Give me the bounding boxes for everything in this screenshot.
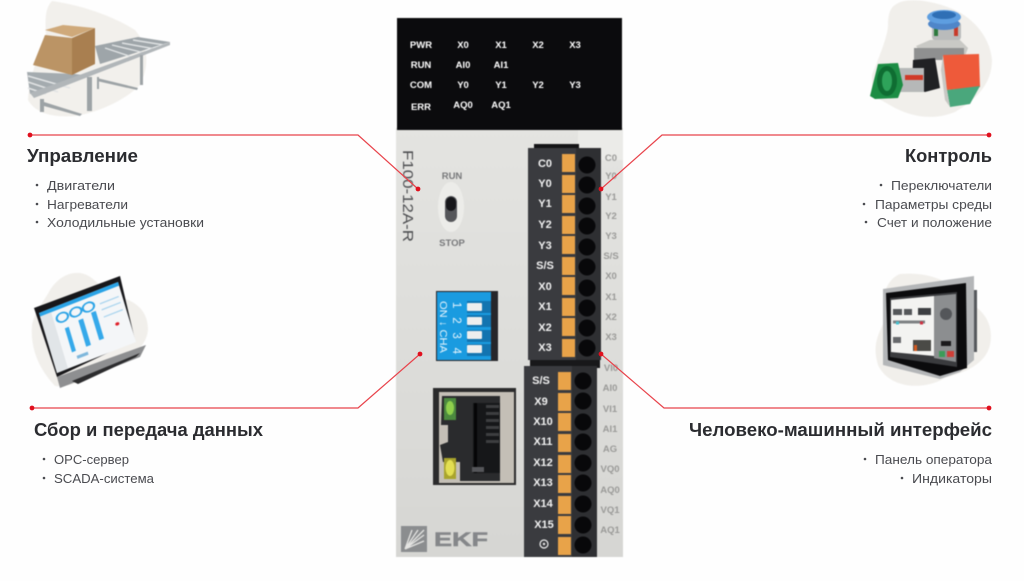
upper terminal block: X3 <box>538 342 552 354</box>
icon: laptop with dashboard <box>32 273 148 388</box>
run/stop switch: STOP <box>439 238 466 249</box>
indicator panel <box>397 18 622 130</box>
terminal side labels: X3 <box>605 332 617 343</box>
list: data items <box>43 452 155 486</box>
terminal side labels: S/S <box>603 251 619 262</box>
upper terminal block: S/S <box>536 260 554 272</box>
terminal side labels: AI1 <box>603 424 618 435</box>
device body <box>396 128 623 557</box>
lower terminal block: X13 <box>533 477 553 489</box>
icon: operator panel <box>876 274 991 386</box>
callout line: monitoring (right top) <box>599 133 991 191</box>
upper terminal block: X1 <box>538 301 552 313</box>
heading: HMI: Человеко-машинный интерфейс <box>689 420 992 440</box>
upper terminal block: Y0 <box>538 178 552 190</box>
terminal side labels: X2 <box>605 312 617 323</box>
terminal side labels <box>600 153 620 536</box>
terminal side labels: AQ1 <box>600 525 620 536</box>
upper terminal block: X2 <box>538 322 552 334</box>
indicator panel: PWR <box>410 40 432 51</box>
terminal side labels: Y0 <box>605 171 617 182</box>
indicator panel: ERR <box>411 102 431 113</box>
indicator panel: X2 <box>532 40 544 51</box>
list: HMI items <box>864 452 993 486</box>
indicator panel: AI1 <box>494 60 509 71</box>
indicator panel: X1 <box>495 40 508 51</box>
lower terminal block: X9 <box>534 396 548 408</box>
list: control items: Двигатели <box>47 178 115 193</box>
list: monitoring items: Переключатели <box>891 178 992 193</box>
terminal side labels: Y2 <box>605 211 617 222</box>
callout line: HMI (right bottom) <box>599 352 991 410</box>
DIP switch: 1 2 3 4 <box>450 302 462 355</box>
heading: monitoring: Контроль <box>905 146 992 166</box>
DIP switch <box>436 291 498 361</box>
indicator panel: Y0 <box>457 80 469 91</box>
indicator panel: AQ0 <box>453 100 473 111</box>
upper terminal block: X0 <box>538 281 552 293</box>
lower terminal block: X12 <box>533 457 553 469</box>
lower terminal block: X11 <box>534 436 552 448</box>
terminal side labels: VQ0 <box>600 464 620 475</box>
lower terminal block: X15 <box>534 519 554 531</box>
list: control items <box>36 178 204 230</box>
DIP switch: ON ↓ CHA <box>437 301 449 353</box>
list: data items: SCADA-система <box>54 471 155 486</box>
icon: push buttons <box>870 0 992 117</box>
terminal side labels: X0 <box>605 271 617 282</box>
terminal side labels: C0 <box>605 153 617 164</box>
list: HMI items: Индикаторы <box>912 471 992 486</box>
lower terminal block: X14 <box>533 498 554 510</box>
list: control items: Нагреватели <box>47 197 128 212</box>
EKF logo: EKF <box>434 530 488 551</box>
indicator panel: Y1 <box>495 80 508 91</box>
terminal side labels: VQ1 <box>600 505 620 516</box>
terminal side labels: Y1 <box>605 192 618 203</box>
callout line: control (left top) <box>28 133 420 191</box>
EKF logo <box>401 526 488 552</box>
device: PLC controller <box>396 18 623 557</box>
terminal side labels: Y3 <box>605 231 617 242</box>
run/stop switch <box>438 171 466 249</box>
terminal side labels: AQ0 <box>600 485 620 496</box>
upper terminal block: C0 <box>538 158 552 170</box>
upper terminal block: Y3 <box>538 240 552 252</box>
lower terminal block: X10 <box>533 416 553 428</box>
upper terminal block: Y1 <box>538 198 552 210</box>
indicator panel: X0 <box>457 40 469 51</box>
terminal side labels: X1 <box>605 292 618 303</box>
upper terminal block <box>528 144 601 360</box>
list: HMI items: Панель оператора <box>875 452 993 467</box>
callout line: data (left bottom) <box>30 352 422 410</box>
lower terminal block <box>524 360 600 557</box>
heading: data: Сбор и передача данных <box>34 420 263 440</box>
terminal side labels: AI0 <box>603 383 617 394</box>
list: control items: Холодильные установки <box>47 215 204 230</box>
upper terminal block: Y2 <box>538 219 552 231</box>
indicator panel: COM <box>410 80 432 91</box>
lower terminal block: S/S <box>532 375 550 387</box>
terminal side labels: AG <box>603 444 617 455</box>
list: data items: OPC-сервер <box>54 452 129 467</box>
terminal side labels: VI1 <box>603 404 618 415</box>
list: monitoring items: Параметры среды <box>875 197 992 212</box>
heading: control: Управление <box>27 146 138 166</box>
run/stop switch: RUN <box>442 171 462 182</box>
RJ45 port <box>433 388 516 485</box>
model label: F100-12A-R <box>399 150 416 242</box>
indicator panel: Y2 <box>532 80 544 91</box>
indicator panel: AQ1 <box>491 100 511 111</box>
list: monitoring items <box>863 178 992 230</box>
indicator panel: RUN <box>411 60 431 71</box>
icon: conveyor with box <box>27 1 170 116</box>
list: monitoring items: Счет и положение <box>877 215 992 230</box>
indicator panel: Y3 <box>569 80 581 91</box>
indicator panel: AI0 <box>456 60 470 71</box>
terminal side labels: VI0 <box>604 363 618 374</box>
indicator panel: X3 <box>569 40 581 51</box>
